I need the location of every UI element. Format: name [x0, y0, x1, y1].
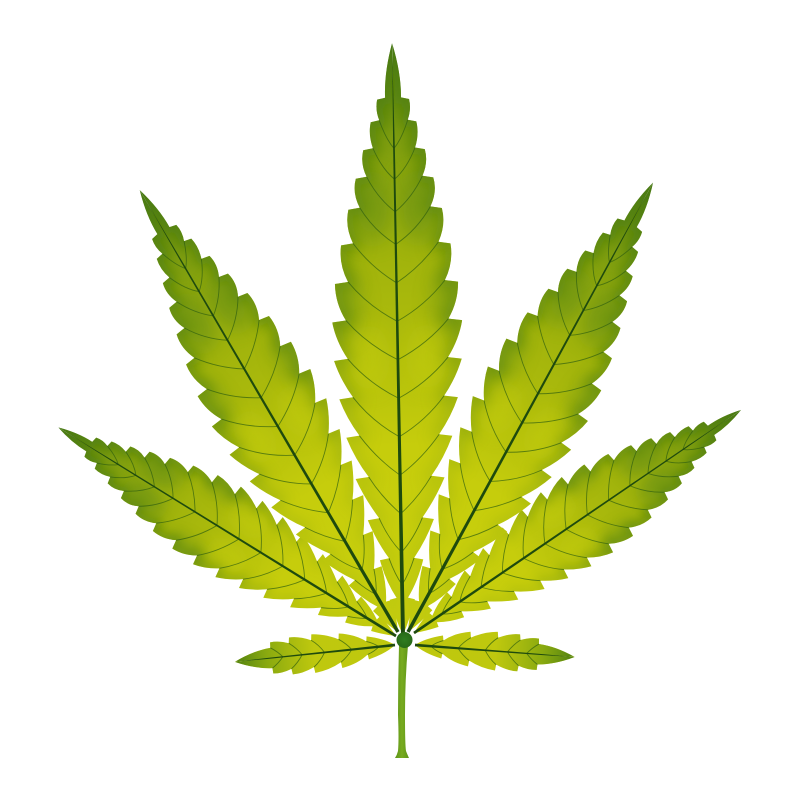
- small left leaflet: [232, 625, 398, 682]
- lower left leaflet: [31, 384, 424, 679]
- small right leaflet: [413, 625, 577, 677]
- upper left leaflet: [85, 157, 452, 665]
- stem: [395, 645, 409, 758]
- center leaflet: [322, 39, 473, 639]
- upper right leaflet: [353, 151, 708, 664]
- stem node: [396, 632, 412, 648]
- lower right leaflet: [385, 368, 770, 675]
